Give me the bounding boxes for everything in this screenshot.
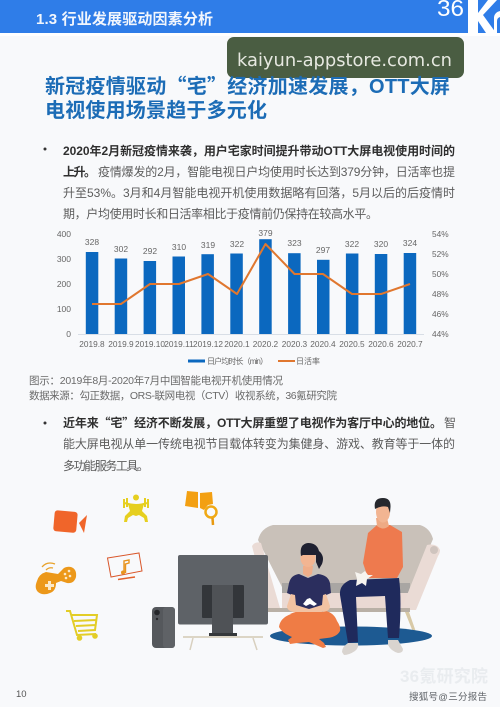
value labels: 322 [230, 239, 244, 249]
icon: weightlifter [124, 494, 148, 522]
watermark badge [227, 37, 464, 78]
header band: 1.3 行业发展驱动因素分析 [36, 10, 213, 28]
x axis labels [79, 339, 423, 349]
text block: first bullet: 期，户均使用时长和日活率相比于疫情前仍保持在较高水平。 [63, 206, 378, 221]
x axis labels: 2020.7 [397, 339, 423, 349]
source watermark: 搜狐号@三分报告 [409, 691, 487, 703]
icon: game controller [36, 563, 76, 594]
left axis labels: 300 [57, 254, 71, 264]
illustration: television on stand [178, 555, 268, 650]
logo: 36Kr [437, 0, 500, 33]
x axis labels: 2019.12 [193, 339, 223, 349]
left axis labels: 100 [57, 304, 71, 314]
right axis labels: 44% [432, 329, 449, 339]
x axis labels: 2019.8 [79, 339, 105, 349]
value labels: 302 [114, 244, 128, 254]
text block: first bullet: 2020年2月新冠疫情来袭，用户宅家时间提升带动OTT大屏电视使用时间的 [63, 143, 455, 158]
title: 电视使用场景趋于多元化 [45, 99, 267, 122]
line series [92, 244, 410, 304]
right axis labels: 50% [432, 269, 449, 279]
illustration: woman sitting on floor [279, 543, 340, 648]
left axis labels: 200 [57, 279, 71, 289]
value labels: 320 [374, 239, 388, 249]
left axis labels: 0 [66, 329, 71, 339]
x axis labels: 2020.4 [310, 339, 336, 349]
text block: first bullet: 疫情爆发的2月，智能电视日户均使用时长达到379分钟，日活率也提 [98, 164, 455, 179]
value labels: 310 [172, 242, 186, 252]
title [45, 70, 450, 122]
icon: shopping cart [66, 611, 97, 640]
x axis labels: 2019.10 [135, 339, 165, 349]
value labels: 322 [345, 239, 359, 249]
chart caption and source [29, 374, 338, 402]
left axis labels: 400 [57, 229, 71, 239]
icon: book and magnifier [185, 491, 216, 525]
value labels: 297 [316, 245, 330, 255]
illustration: rug [270, 626, 432, 646]
bars [86, 239, 416, 334]
page number: 10 [16, 689, 27, 700]
right axis labels [432, 229, 449, 339]
value labels: 324 [403, 238, 417, 248]
legend: 日活率 [296, 356, 320, 366]
right axis labels: 48% [432, 289, 449, 299]
text block: second bullet: 多功能服务工具。 [63, 458, 149, 473]
faint brand watermark: 36氪研究院 [400, 666, 488, 686]
right axis labels: 54% [432, 229, 449, 239]
legend [188, 356, 320, 366]
right axis labels: 46% [432, 309, 449, 319]
x axis labels: 2020.1 [224, 339, 250, 349]
text block: second bullet: 智 [444, 415, 456, 430]
right axis labels: 52% [432, 249, 449, 259]
text block: second bullet: 能大屏电视从单一传统电视节目载体转变为集健身、游戏、教育等于一体的 [63, 436, 455, 451]
x axis labels: 2019.9 [108, 339, 134, 349]
illustration: sofa [252, 525, 440, 632]
icon: music screen [108, 553, 142, 580]
x axis labels: 2020.3 [282, 339, 308, 349]
x axis labels: 2020.5 [339, 339, 365, 349]
icon: video camera [53, 510, 87, 533]
text block: first bullet [44, 143, 455, 221]
value labels: 323 [287, 238, 302, 248]
x axis labels: 2020.6 [368, 339, 394, 349]
illustration: speaker [152, 607, 175, 648]
x axis labels: 2019.11 [164, 339, 194, 349]
watermark badge: kaiyun-appstore.com.cn [237, 50, 452, 71]
value labels [85, 228, 417, 256]
value labels: 379 [258, 228, 273, 238]
value labels: 292 [143, 246, 157, 256]
title: 新冠疫情驱动“宅”经济加速发展，OTT大屏 [45, 70, 450, 99]
text block: second bullet: 近年来“宅”经济不断发展，OTT大屏重塑了电视作为客厅中心的地位。 [63, 414, 442, 431]
text block: first bullet: 升至53%。3月和4月智能电视开机使用数据略有回落，5月以后的后疫情时 [63, 185, 455, 200]
value labels: 328 [85, 237, 99, 247]
header band [0, 0, 500, 36]
value labels: 319 [201, 240, 215, 250]
left axis labels [57, 229, 71, 339]
combo chart: daily viewing minutes and activity rate [57, 228, 449, 366]
chart caption and source: 图示：2019年8月-2020年7月中国智能电视开机使用情况 [29, 374, 284, 387]
text block: second bullet [44, 414, 456, 473]
chart caption and source: 数据来源：勾正数据，ORS-联网电视（CTV）收视系统，36氪研究院 [29, 389, 338, 402]
text block: first bullet: 上升。 [63, 164, 96, 179]
x axis labels: 2020.2 [253, 339, 279, 349]
legend: 日户均时长（min） [207, 356, 268, 366]
illustration: man on sofa [340, 498, 403, 655]
